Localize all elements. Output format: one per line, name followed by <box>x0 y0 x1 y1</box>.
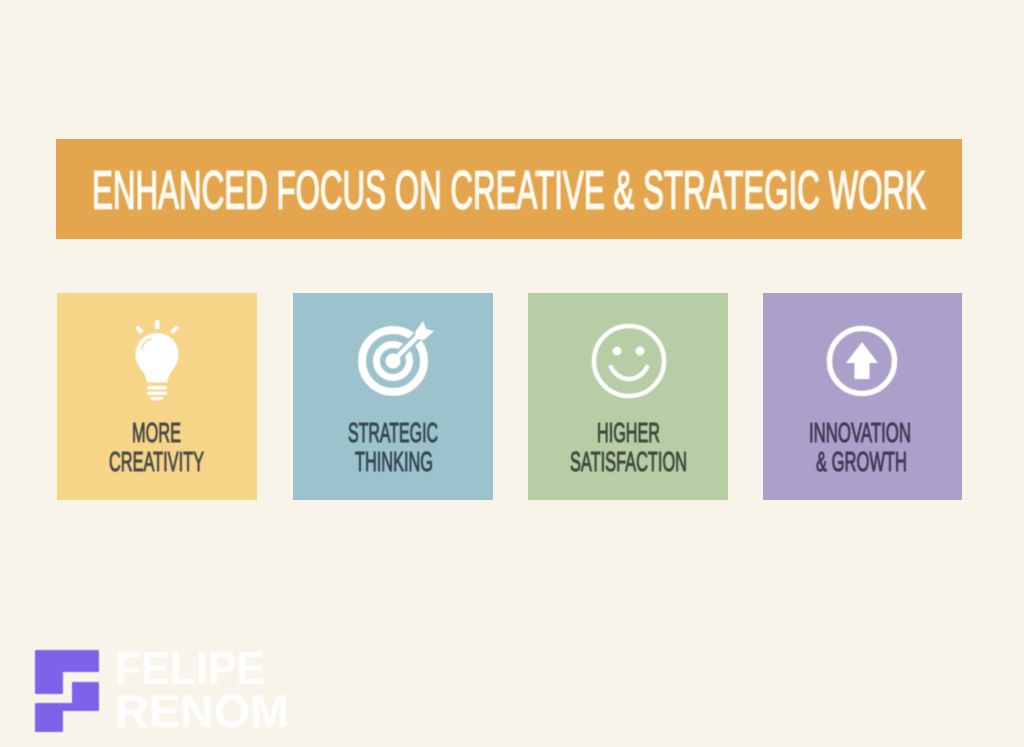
panel: strategic thinking <box>293 293 493 500</box>
label: strategic thinking: THINKING <box>355 446 433 477</box>
logo wordmark: RENOM <box>115 685 289 737</box>
icon: logo mark <box>36 651 98 731</box>
panel: innovation and growth <box>763 293 962 500</box>
icon: target with arrow <box>362 321 434 392</box>
panel: more creativity <box>57 293 257 500</box>
label: higher satisfaction: SATISFACTION <box>570 446 687 477</box>
title banner <box>56 139 962 239</box>
icon: light bulb <box>135 320 180 400</box>
label: more creativity: MORE <box>132 417 181 448</box>
panel: higher satisfaction <box>528 293 728 500</box>
label: strategic thinking: STRATEGIC <box>348 417 438 448</box>
icon: smiley face <box>594 326 664 396</box>
label: innovation and growth <box>809 417 911 477</box>
logo wordmark: FELIPE <box>115 642 265 694</box>
icon: up arrow in circle <box>830 328 894 394</box>
label: more creativity <box>109 417 204 477</box>
label: innovation and growth: INNOVATION <box>809 417 911 448</box>
logo: Felipe Renom <box>36 642 289 737</box>
label: more creativity: CREATIVITY <box>109 446 204 477</box>
label: strategic thinking <box>348 417 438 477</box>
label: higher satisfaction: HIGHER <box>597 417 660 448</box>
logo wordmark <box>115 642 289 737</box>
label: innovation and growth: & GROWTH <box>816 446 907 477</box>
label: higher satisfaction <box>570 417 687 477</box>
